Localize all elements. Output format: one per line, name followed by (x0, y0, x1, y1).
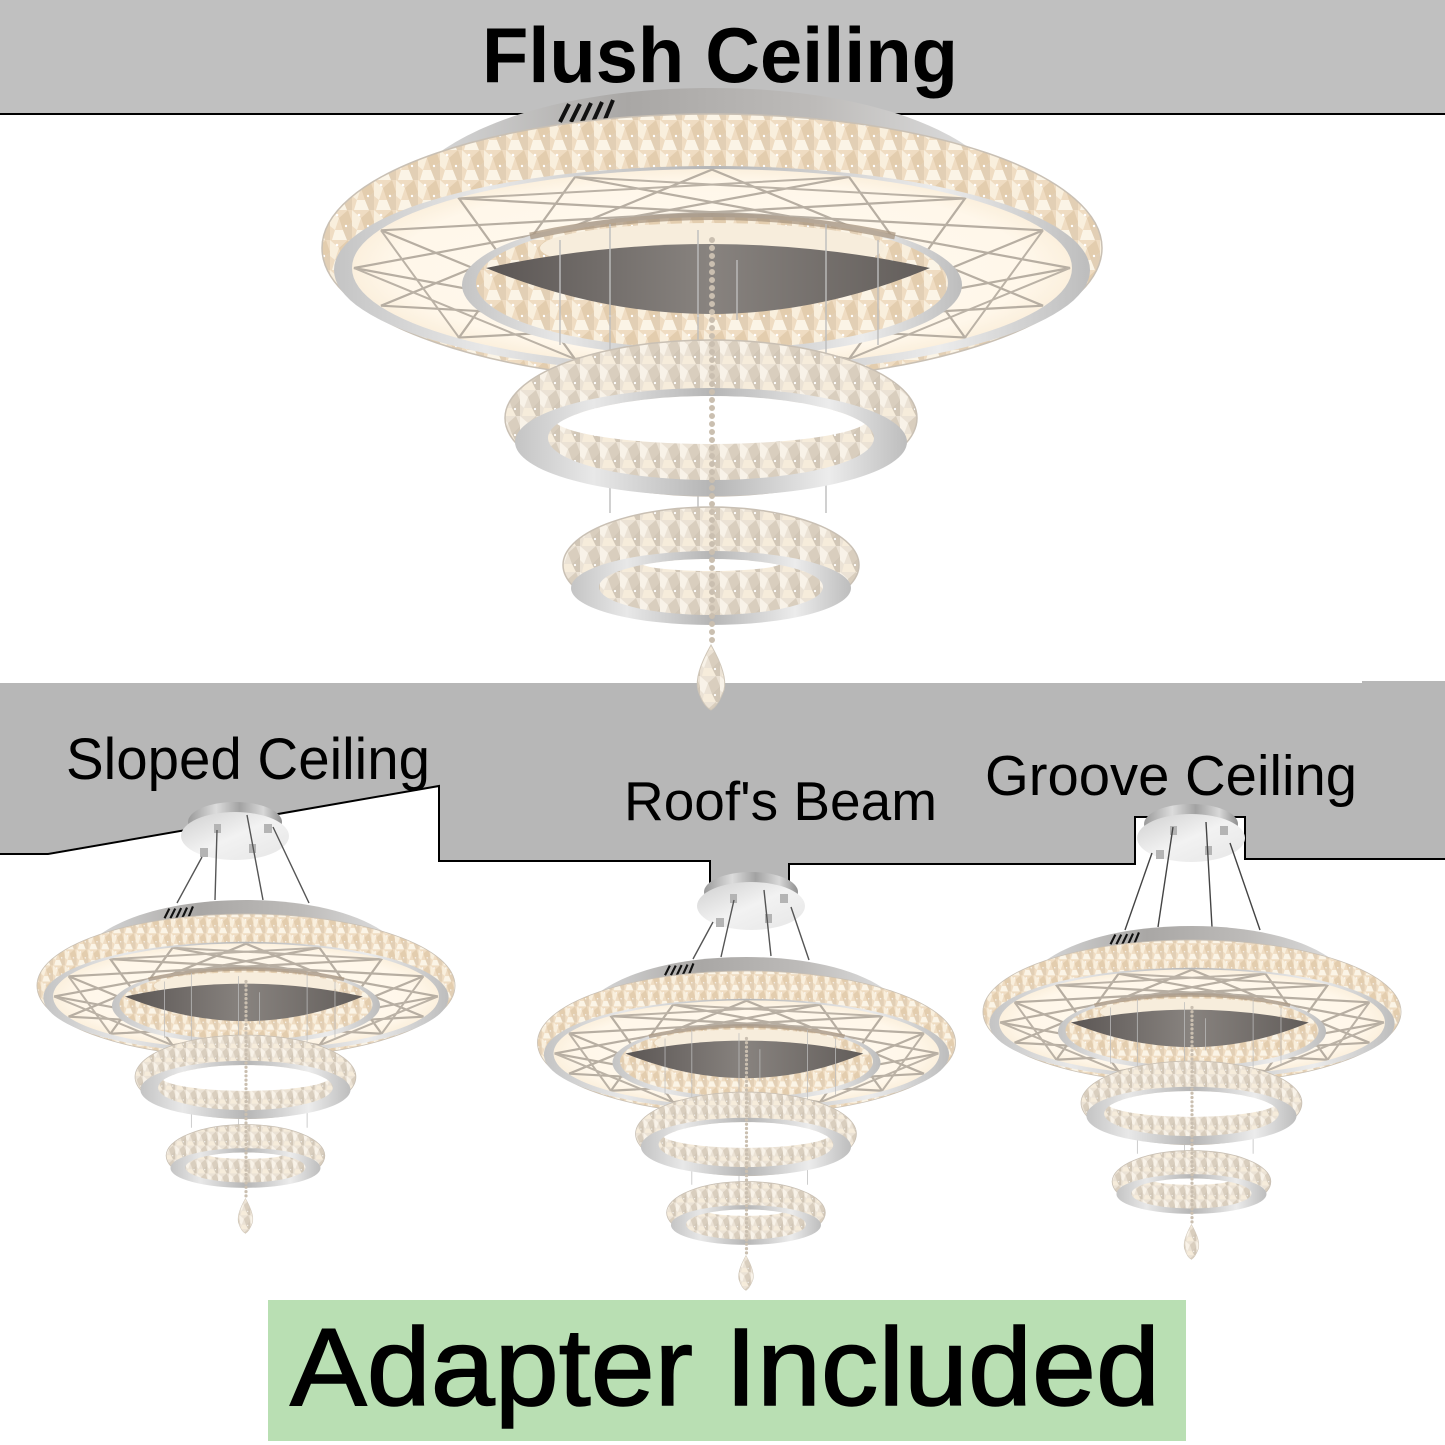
wires: sloped ceiling (177, 815, 309, 903)
lower ring (563, 507, 859, 625)
chandelier: groove ceiling (983, 926, 1401, 1259)
canopy dome with vents (440, 88, 975, 152)
crystal chain (709, 240, 715, 645)
crystal pendant (697, 645, 725, 710)
top ring: crystal band and lit disk (322, 114, 1102, 382)
banner: Adapter Included: Adapter Included (290, 1306, 1160, 1429)
chandelier: roof beam (537, 957, 956, 1290)
label: Sloped Ceiling: Sloped Ceiling (66, 727, 430, 792)
canopy: groove ceiling adapter (1137, 804, 1245, 862)
canopy: sloped ceiling adapter (181, 802, 289, 860)
inner ring of the top tier (462, 213, 962, 357)
suspension wires (560, 224, 878, 550)
canopy: roof beam adapter (697, 872, 805, 930)
panel: flush ceiling surface (0, 0, 1445, 115)
chandelier: large flush mount (322, 88, 1102, 710)
wires: roof beam (693, 890, 809, 960)
chandelier: sloped ceiling (37, 900, 455, 1233)
wires: groove ceiling (1125, 822, 1260, 930)
title: Flush Ceiling: Flush Ceiling (482, 11, 958, 99)
panel: lower ceiling with slope, beam and groove (0, 681, 1445, 885)
middle ring (505, 340, 917, 496)
label: Groove Ceiling: Groove Ceiling (985, 744, 1357, 808)
label: Roof's Beam: Roof's Beam (624, 770, 937, 832)
